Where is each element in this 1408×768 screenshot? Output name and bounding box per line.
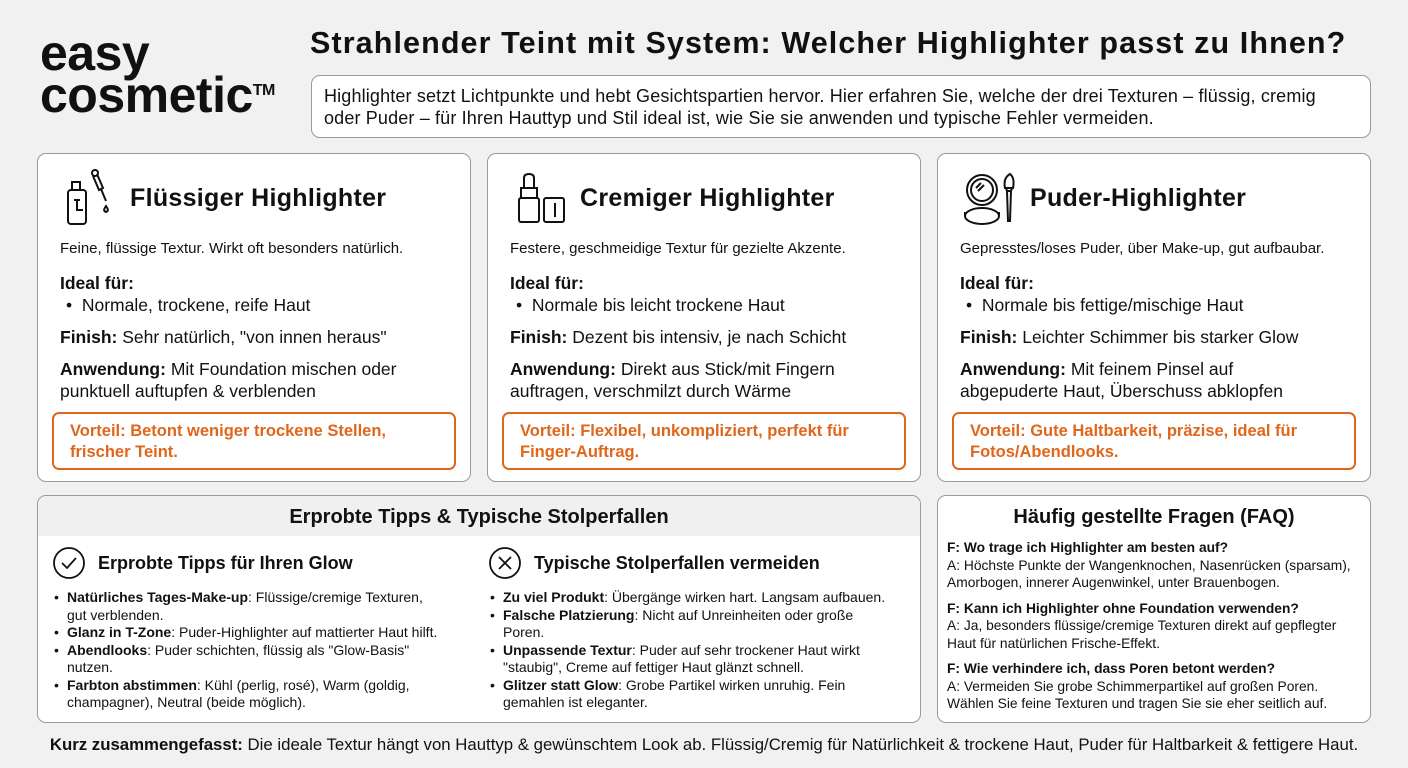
- details: Finish: Leichter Schimmer bis starker Glow: [960, 327, 1298, 347]
- panel: tipps & stolperfallen: nutzen.: [67, 659, 113, 675]
- details: Ideal für:: [60, 273, 134, 293]
- panel: tipps & stolperfallen: Natürliches Tages-Make-up: Flüssige/cremige Texturen,: [67, 589, 423, 605]
- details: Ideal für:: [510, 273, 584, 293]
- logo: [40, 25, 275, 123]
- details: Ideal für:: [960, 273, 1034, 293]
- panel: tipps & stolperfallen: Farbton abstimmen: Kühl (perlig, rosé), Warm (goldig,: [67, 676, 410, 692]
- faq items: A: Höchste Punkte der Wangenknochen, Nasenrücken (sparsam),: [947, 558, 1351, 572]
- panel: tipps & stolperfallen: "staubig", Creme auf fettiger Haut glänzt schnell.: [503, 659, 804, 675]
- title: Strahlender Teint mit System: Welcher Highlighter passt zu Ihnen?: [310, 26, 1346, 60]
- panel: tipps & stolperfallen: Falsche Platzierung: Nicht auf Unreinheiten oder große: [503, 606, 853, 622]
- panel: tipps & stolperfallen: [37, 495, 921, 723]
- details: [510, 273, 846, 401]
- callout: vorteil: Fotos/Abendlooks.: [970, 443, 1118, 461]
- heading band: Erprobte Tipps & Typische Stolperfallen: [289, 506, 669, 528]
- column: tipps: [53, 547, 437, 710]
- details: Anwendung: Mit feinem Pinsel auf: [960, 359, 1233, 379]
- details: Finish: Sehr natürlich, "von innen heraus": [60, 327, 387, 347]
- faq items: A: Vermeiden Sie grobe Schimmerpartikel auf großen Poren.: [947, 678, 1318, 694]
- faq items: Wählen Sie feine Texturen und tragen Sie sie eher seitlich auf.: [947, 696, 1327, 711]
- icon: check circle: [53, 547, 85, 579]
- callout: vorteil: [952, 412, 1356, 470]
- faq items: Haut für natürlichen Frische-Effekt.: [947, 636, 1160, 650]
- description: Festere, geschmeidige Textur für gezielte Akzente.: [510, 240, 846, 257]
- description: Gepresstes/loses Puder, über Make-up, gut aufbaubar.: [960, 240, 1324, 257]
- callout: vorteil: Vorteil: Flexibel, unkompliziert, perfekt für: [520, 422, 849, 440]
- heading: Puder-Highlighter: [1030, 184, 1246, 212]
- details: punktuell auftupfen & verblenden: [60, 381, 316, 401]
- panel: tipps & stolperfallen: Poren.: [503, 624, 544, 640]
- panel: tipps & stolperfallen: champagner), Neutral (beide möglich).: [67, 694, 306, 710]
- intro text box: Highlighter setzt Lichtpunkte und hebt Gesichtspartien hervor. Hier erfahren Sie, welche der drei Texturen – flüssig, cremig: [324, 86, 1316, 106]
- panel: puder highlighter: [937, 153, 1371, 482]
- details: [60, 273, 396, 401]
- heading: Häufig gestellte Fragen (FAQ): [1013, 506, 1295, 528]
- intro text box: [311, 75, 1371, 138]
- faq items: F: Wie verhindere ich, dass Poren betont werden?: [947, 661, 1275, 676]
- callout: vorteil: [52, 412, 456, 470]
- faq items: A: Ja, besonders flüssige/cremige Texturen direkt auf gepflegter: [947, 618, 1336, 633]
- icon: bottle with dropper: [67, 169, 109, 225]
- heading: Cremiger Highlighter: [580, 184, 835, 212]
- details: Finish: Dezent bis intensiv, je nach Schicht: [510, 327, 846, 347]
- callout: vorteil: Vorteil: Betont weniger trockene Stellen,: [70, 422, 386, 440]
- details: • Normale bis fettige/mischige Haut: [966, 295, 1244, 315]
- faq items: F: Wo trage ich Highlighter am besten auf?: [947, 540, 1228, 555]
- details: auftragen, verschmilzt durch Wärme: [510, 381, 791, 401]
- intro text box: oder Puder – für Ihren Hauttyp und Stil ideal ist, wie Sie sie anwenden und typische Fehler vermeiden.: [324, 108, 1154, 128]
- panel: tipps & stolperfallen: Unpassende Textur: Puder auf sehr trockener Haut wirkt: [503, 642, 860, 658]
- panel: FAQ: [937, 495, 1371, 723]
- footer summary: Kurz zusammengefasst: Die ideale Textur hängt von Hauttyp & gewünschtem Look ab. Flüssig/Cremig für Natürlichkeit & trockene Haut, Puder für Haltbarkeit & fettigere Haut.: [50, 735, 1358, 754]
- faq items: [947, 540, 1351, 711]
- panel: tipps & stolperfallen: Typische Stolperfallen vermeiden: [534, 553, 820, 573]
- panel: tipps & stolperfallen: Abendlooks: Puder schichten, flüssig als "Glow-Basis": [67, 642, 409, 658]
- panel: tipps & stolperfallen: Glanz in T-Zone: Puder-Highlighter auf mattierter Haut hilft.: [67, 624, 437, 640]
- details: • Normale, trockene, reife Haut: [66, 295, 310, 315]
- details: Anwendung: Direkt aus Stick/mit Fingern: [510, 359, 835, 379]
- description: Feine, flüssige Textur. Wirkt oft besonders natürlich.: [60, 240, 403, 257]
- heading band: [38, 496, 920, 536]
- panel: tipps & stolperfallen: gut verblenden.: [67, 606, 164, 622]
- logo: cosmeticTM: [40, 67, 275, 123]
- icon: compact and brush: [964, 172, 1015, 225]
- callout: vorteil: frischer Teint.: [70, 443, 178, 461]
- logo: easy: [40, 25, 149, 81]
- callout: vorteil: [502, 412, 906, 470]
- details: [960, 273, 1298, 401]
- panel: cremiger highlighter: [487, 153, 921, 482]
- callout: vorteil: Finger-Auftrag.: [520, 443, 639, 461]
- details: abgepuderte Haut, Überschuss abklopfen: [960, 381, 1283, 401]
- panel: flüssiger highlighter: [37, 153, 471, 482]
- callout: vorteil: Vorteil: Gute Haltbarkeit, präzise, ideal für: [970, 422, 1297, 440]
- panel: tipps & stolperfallen: Zu viel Produkt: Übergänge wirken hart. Langsam aufbauen.: [503, 589, 885, 605]
- icon: x circle: [489, 547, 521, 579]
- panel: tipps & stolperfallen: Glitzer statt Glow: Grobe Partikel wirken unruhig. Fein: [503, 676, 845, 692]
- panel: tipps & stolperfallen: Erprobte Tipps für Ihren Glow: [98, 553, 353, 573]
- details: • Normale bis leicht trockene Haut: [516, 295, 785, 315]
- details: Anwendung: Mit Foundation mischen oder: [60, 359, 396, 379]
- panel: tipps & stolperfallen: gemahlen ist eleganter.: [503, 694, 648, 710]
- column: stolperfallen: [489, 547, 885, 710]
- heading: Flüssiger Highlighter: [130, 184, 386, 212]
- faq items: Amorbogen, innerer Augenwinkel, unter Brauenbogen.: [947, 575, 1280, 590]
- icon: stick: [518, 173, 565, 223]
- faq items: F: Kann ich Highlighter ohne Foundation verwenden?: [947, 600, 1299, 616]
